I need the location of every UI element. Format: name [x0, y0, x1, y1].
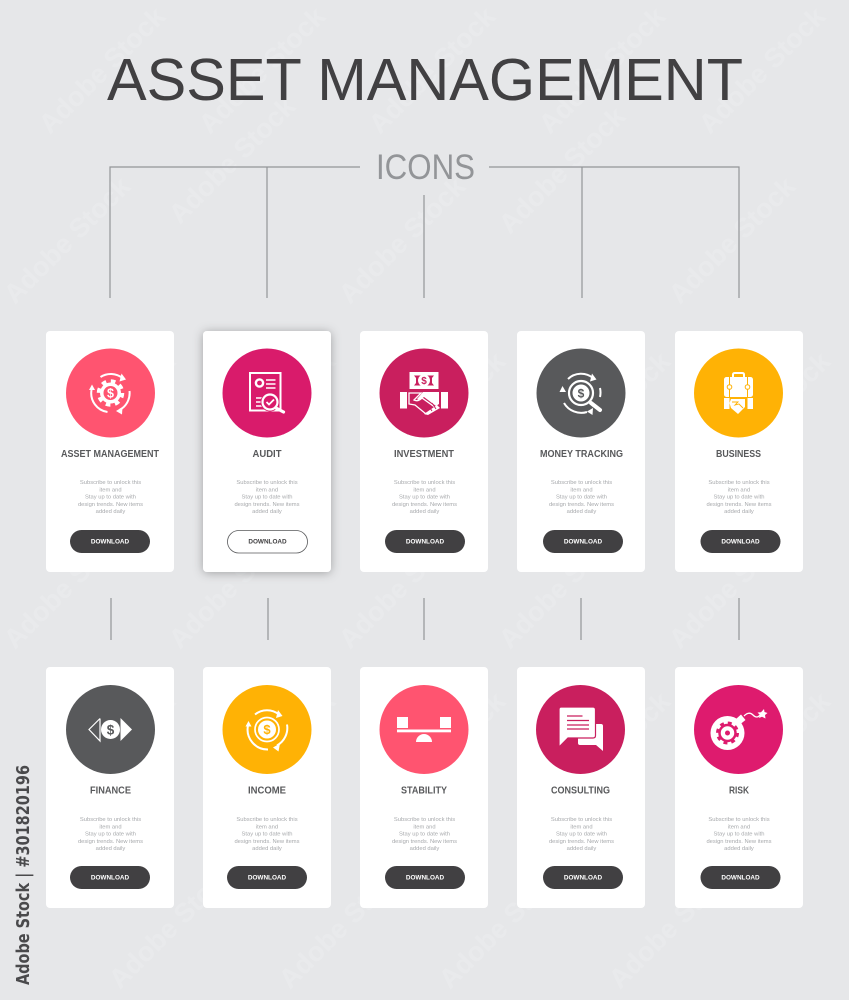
panel: consulting — [517, 667, 645, 908]
description: design trends. New items — [392, 839, 457, 845]
description: Subscribe to unlock this — [551, 480, 612, 486]
subtitle: icons: ICONS — [376, 148, 475, 187]
text: Adobe Stock — [33, 1, 172, 139]
icon: finance arrows — [66, 685, 155, 774]
button: DOWNLOAD — [406, 538, 445, 546]
text: Adobe Stock — [163, 91, 302, 229]
text: Adobe Stock — [0, 171, 137, 309]
description: item and — [570, 487, 593, 493]
description: added daily — [567, 846, 596, 852]
description: Stay up to date with — [399, 832, 450, 838]
text: Adobe Stock — [0, 516, 137, 654]
description: Stay up to date with — [556, 495, 607, 501]
icon: risk bomb — [694, 685, 783, 774]
button — [385, 866, 465, 889]
text: Adobe Stock — [203, 686, 342, 824]
description: Stay up to date with — [242, 832, 292, 838]
description: added daily — [724, 509, 754, 515]
connector lines: between rows — [111, 598, 739, 640]
description: item and — [256, 824, 278, 830]
label: BUSINESS — [716, 449, 761, 460]
text: Adobe Stock — [373, 686, 512, 824]
button: DOWNLOAD — [721, 874, 760, 882]
text: Adobe Stock — [538, 346, 677, 484]
label: STABILITY — [401, 786, 447, 796]
text: Adobe Stock — [43, 686, 182, 824]
button — [543, 530, 623, 553]
text: Adobe Stock — [433, 856, 572, 994]
connector lines: top tree — [110, 167, 739, 298]
text: Adobe Stock — [698, 686, 837, 824]
description: Stay up to date with — [242, 495, 292, 501]
icon: asset management gear: $ — [107, 386, 114, 400]
title: ASSET MANAGEMENT — [107, 47, 743, 113]
description: Subscribe to unlock this — [708, 817, 770, 823]
text: Adobe Stock — [103, 856, 242, 994]
description: Subscribe to unlock this — [236, 480, 298, 486]
description: Subscribe to unlock this — [80, 480, 141, 486]
button — [228, 530, 308, 553]
icon: finance arrows: $ — [107, 722, 115, 738]
description: added daily — [96, 509, 125, 515]
panel: asset management — [46, 331, 174, 572]
description: Stay up to date with — [399, 495, 450, 501]
description: Stay up to date with — [85, 832, 136, 838]
icon: income coin — [222, 685, 312, 774]
icon: audit document — [222, 348, 312, 438]
button: DOWNLOAD — [721, 538, 760, 546]
description: item and — [728, 487, 750, 493]
text: Adobe Stock — [43, 346, 182, 484]
description: design trends. New items — [78, 839, 143, 845]
icon: stability balance — [380, 685, 468, 774]
text: Adobe Stock — [603, 856, 742, 994]
text: Adobe Stock — [373, 346, 512, 484]
description: design trends. New items — [234, 839, 300, 845]
panel: money tracking — [517, 331, 645, 572]
label: AUDIT — [252, 449, 282, 460]
icon: business briefcase — [694, 348, 783, 438]
text: Adobe Stock — [693, 1, 832, 139]
description: design trends. New items — [706, 502, 772, 508]
button: DOWNLOAD — [91, 874, 130, 882]
text: Adobe Stock — [363, 1, 502, 139]
text: Adobe Stock — [493, 516, 632, 654]
button: DOWNLOAD — [406, 874, 445, 882]
icon: money tracking magnifier: $ — [578, 386, 585, 400]
description: item and — [99, 487, 122, 493]
description: Subscribe to unlock this — [80, 817, 141, 823]
description: Stay up to date with — [556, 832, 607, 838]
panel: stability — [360, 667, 488, 908]
panel: business — [675, 331, 803, 572]
button — [700, 530, 780, 553]
text: Adobe Stock — [193, 1, 332, 139]
description: item and — [570, 824, 593, 830]
description: Subscribe to unlock this — [394, 817, 455, 823]
label: FINANCE — [90, 786, 131, 796]
icon: consulting chat bubbles — [536, 685, 625, 774]
button — [70, 866, 150, 889]
description: added daily — [96, 846, 125, 852]
button — [543, 866, 623, 889]
description: added daily — [252, 509, 282, 515]
panel: audit — [203, 331, 331, 572]
description: design trends. New items — [549, 502, 614, 508]
panel: income — [203, 667, 331, 908]
description: item and — [99, 824, 122, 830]
button: DOWNLOAD — [564, 874, 603, 882]
description: design trends. New items — [706, 839, 772, 845]
panel: risk — [675, 667, 803, 908]
stock id side text: Adobe Stock | #301820196 — [13, 765, 34, 985]
label: INVESTMENT — [394, 449, 454, 460]
description: Subscribe to unlock this — [708, 480, 770, 486]
description: item and — [256, 487, 278, 493]
text: Adobe Stock — [533, 1, 672, 139]
description: Subscribe to unlock this — [236, 817, 298, 823]
icon: asset management gear — [66, 348, 155, 438]
description: added daily — [724, 846, 754, 852]
description: design trends. New items — [392, 502, 457, 508]
panel: investment — [360, 331, 488, 572]
label: ASSET MANAGEMENT — [61, 449, 159, 460]
description: added daily — [410, 509, 439, 515]
label: CONSULTING — [551, 786, 610, 796]
text: Adobe Stock — [663, 516, 802, 654]
description: Subscribe to unlock this — [394, 480, 455, 486]
description: design trends. New items — [549, 839, 614, 845]
icon: money tracking magnifier — [536, 348, 626, 438]
description: design trends. New items — [78, 502, 143, 508]
text: Adobe Stock — [163, 516, 302, 654]
description: design trends. New items — [234, 502, 300, 508]
label: RISK — [729, 786, 750, 796]
description: item and — [728, 824, 750, 830]
icon: investment handshake: $ — [421, 376, 427, 387]
label: MONEY TRACKING — [540, 449, 623, 460]
button: DOWNLOAD — [248, 874, 287, 882]
button: DOWNLOAD — [248, 538, 287, 546]
description: Stay up to date with — [714, 832, 764, 838]
description: Stay up to date with — [714, 495, 764, 501]
button — [70, 530, 150, 553]
description: added daily — [410, 846, 439, 852]
text: Adobe Stock — [333, 171, 472, 309]
text: Adobe Stock — [493, 101, 632, 239]
icon: income coin: $ — [263, 722, 271, 737]
text: Adobe Stock — [333, 516, 472, 654]
button — [385, 530, 465, 553]
description: item and — [413, 824, 436, 830]
label: INCOME — [248, 786, 286, 796]
text: Adobe Stock — [698, 346, 837, 484]
description: added daily — [252, 846, 282, 852]
text: Adobe Stock — [538, 686, 677, 824]
panel: finance — [46, 667, 174, 908]
description: Stay up to date with — [85, 495, 136, 501]
button: DOWNLOAD — [564, 538, 603, 546]
description: item and — [413, 487, 436, 493]
description: added daily — [567, 509, 596, 515]
description: Subscribe to unlock this — [551, 817, 612, 823]
text: Adobe Stock — [203, 346, 342, 484]
button: DOWNLOAD — [91, 538, 130, 546]
icon: investment handshake — [380, 348, 468, 438]
button — [227, 866, 307, 889]
text: Adobe Stock — [663, 171, 802, 309]
text: Adobe Stock — [273, 856, 412, 994]
button — [700, 866, 780, 889]
